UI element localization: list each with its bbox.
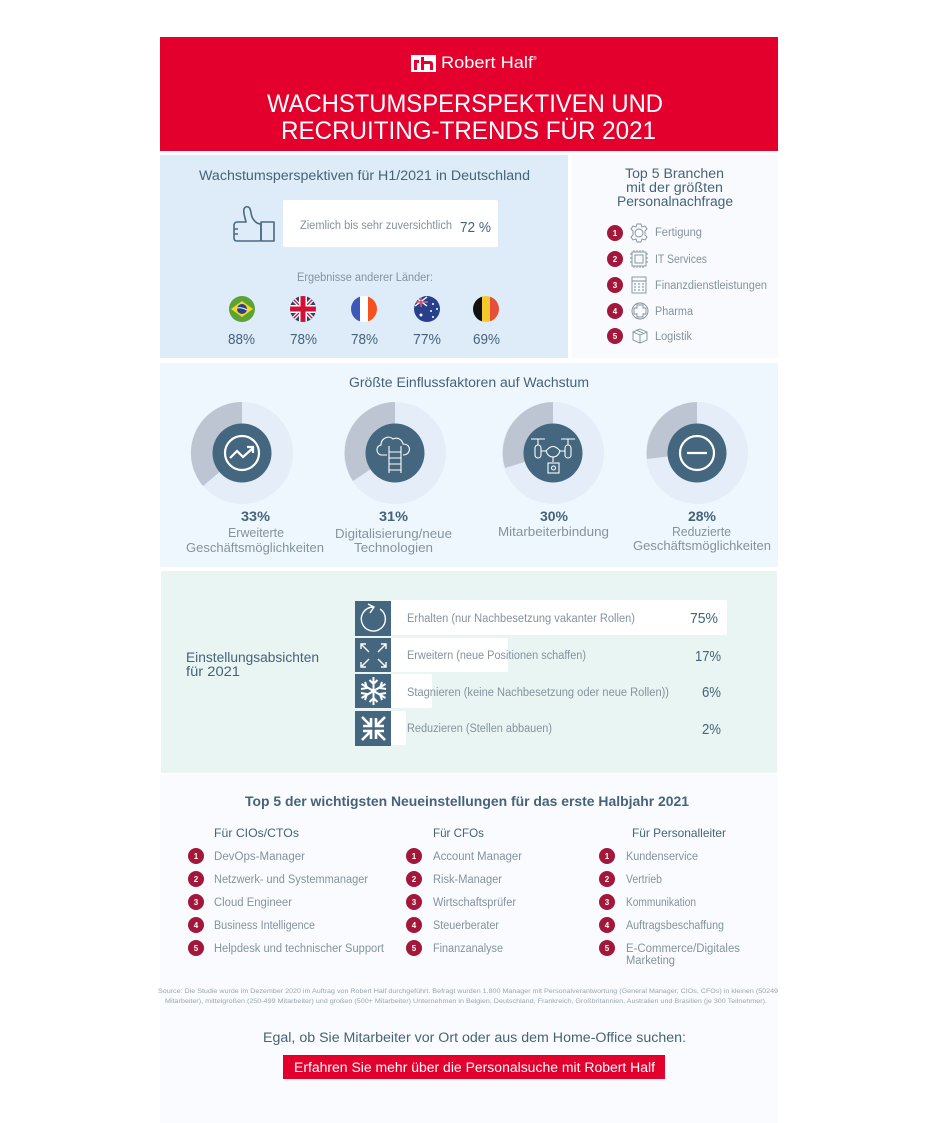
- column: CIOs/CTOs: DevOps-Manager: [214, 851, 305, 863]
- column: CFOs: 4: [412, 921, 417, 930]
- callout: 72 percent: [283, 200, 498, 247]
- column: Personalleiter: Kommunikation: [626, 897, 696, 909]
- column: CFOs: Account Manager: [433, 851, 522, 863]
- list item: Finanzdienstleistungen: [607, 277, 767, 293]
- panel: Einstellungsabsichten: [161, 571, 777, 773]
- column: Personalleiter: Marketing: [626, 955, 675, 967]
- panel: Einflussfaktoren: [160, 363, 778, 567]
- column: CFOs: [406, 826, 522, 956]
- label: 28 percent: [633, 508, 771, 553]
- bar: Stagnieren: Stagnieren (keine Nachbesetzung oder neue Rollen)): [407, 687, 669, 699]
- title: RECRUITING-TRENDS FÜR 2021: [281, 117, 656, 145]
- bar: Erhalten: [355, 600, 727, 636]
- label: 33 percent: Geschäftsmöglichkeiten: [186, 540, 324, 555]
- country percentages: 77%: [413, 332, 441, 348]
- list item: Logistik: 5: [613, 332, 618, 341]
- flag: Brazil: [229, 296, 255, 322]
- column: CIOs/CTOs: 2: [194, 875, 199, 884]
- column: CFOs: Risk-Manager: [433, 874, 502, 886]
- title: WACHSTUMSPERSPEKTIVEN UND: [267, 90, 663, 118]
- bar: Erweitern: [355, 638, 721, 672]
- heading: Top 5 Neueinstellungen: Top 5 der wichtigsten Neueinstellungen für das erste Halbjahr 2021: [245, 794, 690, 809]
- callout: 72 percent: 72 %: [460, 219, 491, 236]
- list item: IT Services: [607, 250, 707, 268]
- column: Personalleiter: Kundenservice: [626, 851, 698, 863]
- icon: drone: [531, 439, 575, 473]
- heading: Größte Einflussfaktoren auf Wachstum: [349, 375, 589, 390]
- icon: minus: [680, 436, 714, 470]
- list item: IT Services: 2: [613, 255, 618, 264]
- logo: Robert Half: Robert Half: [441, 53, 533, 72]
- bar: Erweitern: Erweitern (neue Positionen schaffen): [407, 650, 586, 662]
- label: 33 percent: Erweiterte: [228, 525, 284, 540]
- label: 33 percent: 33%: [241, 508, 271, 524]
- label: 31 percent: 31%: [379, 508, 409, 524]
- flag: United Kingdom: [290, 296, 316, 322]
- icon: growth: [225, 436, 259, 470]
- column: CIOs/CTOs: 4: [194, 921, 199, 930]
- list item: Finanzdienstleistungen: Finanzdienstleistungen: [655, 280, 767, 292]
- flag: Belgium: [473, 296, 499, 322]
- column: Personalleiter: Auftragsbeschaffung: [626, 920, 724, 932]
- donut chart: 28 percent: [646, 402, 748, 504]
- column: CIOs/CTOs: 3: [194, 898, 199, 907]
- country percentages: 88%: [228, 332, 255, 348]
- icon: thumbs up: [234, 207, 274, 241]
- logo: Robert Half: ®: [533, 55, 537, 62]
- list item: Logistik: [607, 328, 692, 344]
- country percentages: 78%: [290, 332, 317, 348]
- donut chart: 33 percent: [191, 402, 293, 504]
- bar: Erhalten: Erhalten (nur Nachbesetzung vakanter Rollen): [407, 613, 635, 625]
- bar: Reduzieren: 2%: [702, 721, 721, 738]
- label: 33 percent: [186, 508, 324, 555]
- button: [283, 1055, 665, 1079]
- list item: Finanzdienstleistungen: 3: [613, 281, 618, 290]
- label: 28 percent: 28%: [688, 508, 717, 524]
- button: Erfahren Sie mehr über die Personalsuche mit Robert Half: [294, 1060, 655, 1075]
- panel: lower background: [160, 775, 778, 1123]
- source note: Mitarbeiter), mittelgroßen (250-499 Mitarbeiter) und großen (500+ Mitarbeiter) Unternehmen in Belgien, Deutschland, Frankreich, Großbritannien, Australien und Brasilien (je 300 Teilnehmer).: [165, 998, 767, 1005]
- column: CIOs/CTOs: Netzwerk- und Systemmanager: [214, 874, 368, 886]
- bar: Stagnieren: 6%: [702, 684, 721, 701]
- list item: Fertigung: [607, 224, 702, 242]
- call to action text: Egal, ob Sie Mitarbeiter vor Ort oder aus dem Home-Office suchen:: [263, 1030, 686, 1045]
- column: CIOs/CTOs: Cloud Engineer: [214, 897, 292, 909]
- country percentages: 78%: [351, 332, 378, 348]
- list item: IT Services: IT Services: [655, 254, 707, 266]
- label: 28 percent: Reduzierte: [672, 524, 731, 539]
- panel: Top 5 Branchen: [572, 155, 778, 358]
- donut chart: 30 percent: [502, 402, 604, 504]
- column: Personalleiter: E-Commerce/Digitales: [626, 943, 740, 955]
- list item: Fertigung: 1: [613, 229, 618, 238]
- label: 30 percent: [498, 508, 609, 539]
- bar: Reduzieren: Reduzieren (Stellen abbauen): [407, 723, 552, 735]
- column: Personalleiter: 4: [605, 921, 610, 930]
- column: CIOs/CTOs: Für CIOs/CTOs: [214, 826, 299, 840]
- column: CFOs: Wirtschaftsprüfer: [433, 897, 516, 909]
- heading: Top 5 Branchen: [625, 166, 724, 181]
- column: Personalleiter: 5: [605, 944, 610, 953]
- subheading: other countries: Ergebnisse anderer Länder:: [297, 272, 433, 284]
- bar: Stagnieren: [355, 674, 721, 708]
- heading: Personalnachfrage: [617, 194, 733, 209]
- panel: Wachstumsperspektiven Deutschland: [160, 155, 568, 358]
- label: 28 percent: Geschäftsmöglichkeiten: [633, 538, 771, 553]
- heading: Wachstumsperspektiven für H1/2021 in Deutschland: [199, 168, 530, 183]
- logo: Robert Half: [411, 53, 537, 72]
- callout: 72 percent: Ziemlich bis sehr zuversichtlich: [300, 220, 452, 232]
- source note: [158, 988, 778, 1005]
- heading: [617, 166, 733, 209]
- list item: Pharma: [607, 303, 694, 319]
- label: 31 percent: Technologien: [354, 540, 433, 555]
- country percentages: 69%: [473, 332, 500, 348]
- heading: mit der größten: [626, 180, 723, 195]
- column: Personalleiter: 3: [605, 898, 610, 907]
- label: 30 percent: Mitarbeiterbindung: [498, 524, 609, 539]
- heading: [186, 650, 319, 679]
- list item: Pharma: 4: [613, 307, 618, 316]
- flag: Australia: [414, 296, 440, 322]
- column: CIOs/CTOs: 5: [194, 944, 199, 953]
- label: 30 percent: 30%: [540, 508, 569, 524]
- column: CFOs: 1: [412, 852, 417, 861]
- column: CIOs/CTOs: Business Intelligence: [214, 920, 315, 932]
- column: CFOs: 5: [412, 944, 417, 953]
- column: CFOs: Steuerberater: [433, 920, 499, 932]
- title: [267, 90, 663, 145]
- header banner: [160, 37, 778, 151]
- bar: Reduzieren: [355, 711, 721, 746]
- column: CFOs: Finanzanalyse: [433, 943, 503, 955]
- label: 31 percent: Digitalisierung/neue: [335, 526, 452, 541]
- column: Personalleiter: Vertrieb: [626, 874, 662, 886]
- column: CFOs: 3: [412, 898, 417, 907]
- column: CFOs: Für CFOs: [433, 826, 484, 840]
- label: 31 percent: [335, 508, 452, 555]
- bar: Erhalten: 75%: [690, 610, 718, 627]
- bar: Erweitern: 17%: [695, 648, 721, 665]
- column: Personalleiter: 1: [605, 852, 610, 861]
- icon: cloud and ladder: [377, 437, 409, 473]
- column: CFOs: 2: [412, 875, 417, 884]
- country percentages: [228, 332, 500, 348]
- column: CIOs/CTOs: 1: [194, 852, 199, 861]
- source note: Source: Die Studie wurde im Dezember 2020 im Auftrag von Robert Half durchgeführt. Befragt wurden 1.800 Manager mit Personalverantwortung (General Manager, CIOs, CFOs) in kleinen (50249: [158, 988, 778, 995]
- column: Personalleiter: [599, 826, 740, 967]
- column: CIOs/CTOs: [188, 826, 385, 956]
- column: Personalleiter: 2: [605, 875, 610, 884]
- list item: Logistik: Logistik: [655, 331, 692, 343]
- column: CIOs/CTOs: Helpdesk und technischer Support: [214, 943, 385, 955]
- list item: Fertigung: Fertigung: [655, 227, 702, 239]
- list item: Pharma: Pharma: [655, 306, 694, 318]
- heading: für 2021: [186, 664, 240, 679]
- donut chart: 31 percent: [344, 402, 446, 504]
- flag: France: [351, 296, 377, 322]
- heading: Einstellungsabsichten: [186, 650, 319, 665]
- column: Personalleiter: Für Personalleiter: [632, 826, 726, 840]
